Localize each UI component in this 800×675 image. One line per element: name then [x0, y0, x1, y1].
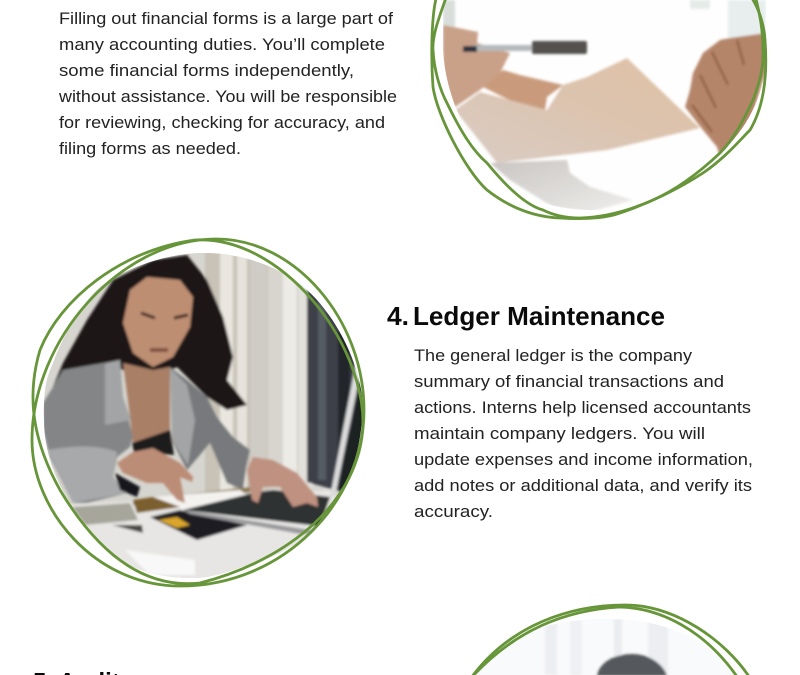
neck and chest: [123, 363, 173, 443]
hands: [117, 448, 193, 503]
body text: financial forms: without assistance. You will be responsible: [58, 87, 397, 106]
body text: financial forms: [58, 9, 397, 158]
table and paper: [71, 488, 336, 578]
body text: financial forms: filing forms as needed.: [59, 139, 241, 158]
hair: [53, 255, 247, 410]
rings: [432, 0, 766, 219]
rings: [471, 605, 750, 675]
photo: woman working on laptop: [30, 239, 370, 590]
panel: audits: [33, 605, 750, 675]
calculator: [150, 510, 247, 540]
blazer: [43, 360, 133, 503]
face: [123, 277, 193, 367]
panel: ledger maintenance: [30, 239, 753, 590]
body text: ledger maintenance: [414, 346, 753, 521]
body text: ledger maintenance: maintain company ledgers. You will: [414, 424, 705, 443]
body text: ledger maintenance: The general ledger is the company: [414, 346, 693, 365]
body text: financial forms: for reviewing, checking for accuracy, and: [59, 113, 385, 132]
panel: financial forms text: [58, 0, 770, 225]
body text: financial forms: some financial forms independently,: [59, 61, 354, 80]
body text: ledger maintenance: add notes or additional data, and verify its: [414, 476, 752, 495]
laptop: [183, 490, 330, 527]
body text: ledger maintenance: summary of financial transactions and: [414, 372, 724, 391]
rings: [32, 239, 364, 586]
heading: 4. Ledger Maintenance: Ledger Maintenance: [413, 301, 665, 331]
body text: ledger maintenance: update expenses and income information,: [414, 450, 753, 469]
body text: ledger maintenance: actions. Interns help licensed accountants: [414, 398, 751, 417]
photo: person seen at top of next circle: [470, 605, 750, 675]
curtains: [205, 250, 310, 500]
body text: financial forms: many accounting duties. You’ll complete: [59, 35, 385, 54]
body text: ledger maintenance: accuracy.: [414, 502, 493, 521]
photo: handing over a document: [430, 0, 770, 225]
heading: 4. Ledger Maintenance: 4.: [387, 301, 409, 331]
body text: financial forms: Filling out financial forms is a large part of: [59, 9, 393, 28]
